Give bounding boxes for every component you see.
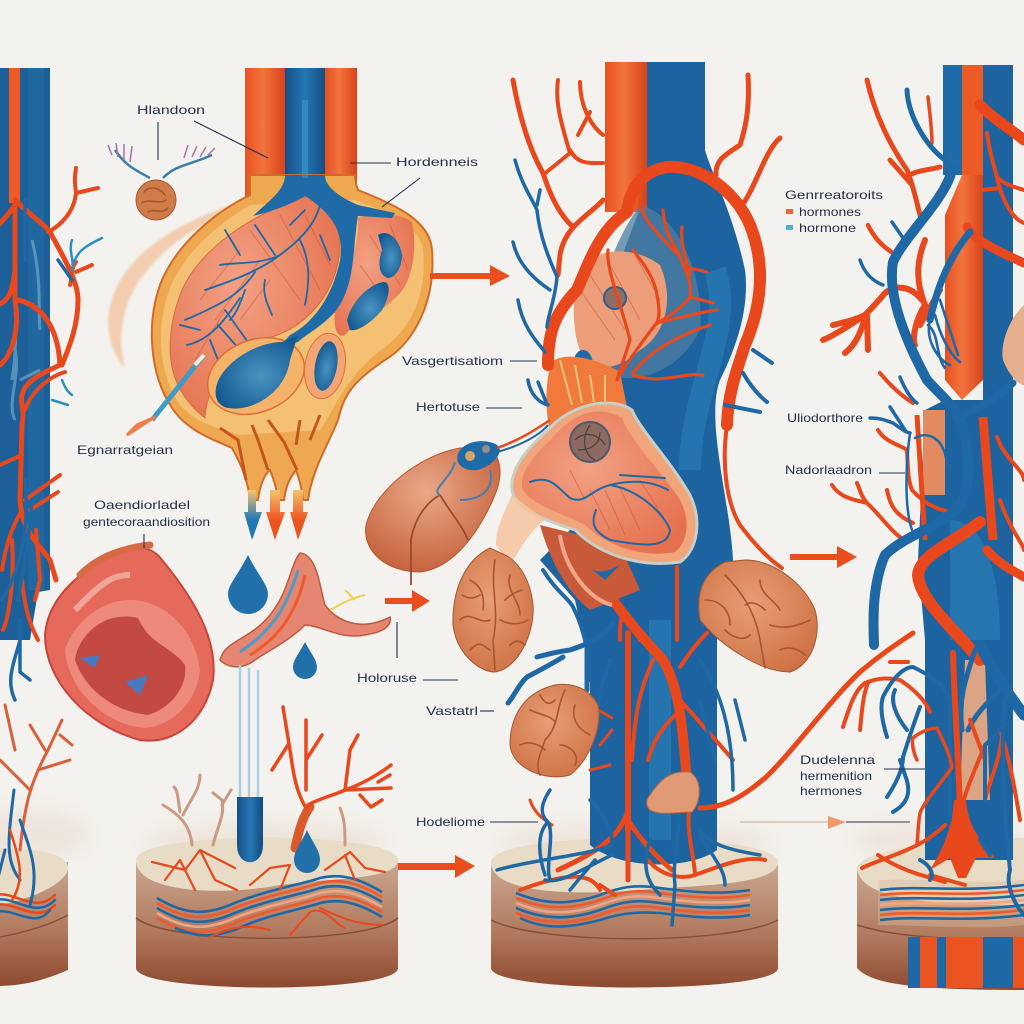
organ: curved duct xyxy=(220,553,430,667)
blue oval chamber xyxy=(196,324,316,428)
arrow: right panel to far right xyxy=(790,546,857,568)
center base cylinder xyxy=(136,822,398,988)
blue side branches xyxy=(497,160,772,925)
streamer to lobe xyxy=(496,495,545,565)
blue knot clamp xyxy=(457,441,500,470)
organ: kidney shaped sac xyxy=(366,420,550,585)
label: gen section: Oaendiorladel xyxy=(94,498,190,512)
top orange trunk xyxy=(605,62,647,212)
tissue striations xyxy=(195,215,408,360)
left column trunk xyxy=(0,68,50,640)
far right blue vessels upper xyxy=(860,90,1013,645)
legend: hormones: hormone xyxy=(799,221,856,235)
blue central vein xyxy=(253,100,395,346)
label: Hlandoon xyxy=(137,103,268,160)
label: Dudelenna hormones: hermenition xyxy=(800,769,872,783)
blue capsule 3 xyxy=(378,233,402,278)
water drops xyxy=(228,555,320,873)
label: Hertotuse: Hertotuse xyxy=(416,400,480,414)
label: Holoruse: Holoruse xyxy=(357,671,417,685)
label: Dudelenna hormones xyxy=(800,753,925,798)
legend: hormones xyxy=(785,188,883,235)
large arching artery xyxy=(548,167,760,425)
base colored bands xyxy=(157,876,382,935)
label: gen section xyxy=(83,498,210,548)
label: Dudelenna hormones: hermones xyxy=(800,784,862,798)
blue test tube with falling streams xyxy=(237,665,263,862)
label: Hlandoon: Hlandoon xyxy=(137,103,205,117)
left coral branches xyxy=(0,705,72,905)
surface branches xyxy=(152,850,385,890)
label: Dudelenna hormones: Dudelenna xyxy=(800,753,875,767)
label: Vastatrl: Vastatrl xyxy=(426,704,478,718)
label: gen section: gentecoraandiosition xyxy=(83,515,210,529)
icon: small brain with antennae xyxy=(108,143,215,220)
thin arrow to far base xyxy=(740,816,910,829)
legend: hormones: hormones xyxy=(799,205,861,219)
base root lines xyxy=(210,908,382,937)
left blue vessels xyxy=(2,200,102,700)
label: Nadorlaadron: Nadorlaadron xyxy=(785,463,872,477)
label: Vasgertisatiom xyxy=(402,354,537,368)
label: Vasgertisatiom: Vasgertisatiom xyxy=(402,354,503,368)
label: Uliodorthore: Uliodorthore xyxy=(787,411,863,425)
small brown chamber xyxy=(604,287,626,309)
blue capsule 1 xyxy=(300,330,350,402)
gland trunk vessels xyxy=(245,68,357,203)
orange arteries xyxy=(513,75,913,895)
label: Hordenneis xyxy=(350,155,478,207)
highlight on vein xyxy=(660,270,720,840)
far right base cylinder xyxy=(850,822,1024,990)
organ: brain-like lobe right xyxy=(699,560,817,672)
arrow: duct to lobes xyxy=(385,590,430,612)
partial organ at edge xyxy=(1002,305,1024,385)
small gland on vessel xyxy=(647,772,699,813)
label: Hodeliome: Hodeliome xyxy=(416,815,485,829)
arrow: base to right xyxy=(398,855,475,878)
flowing orange bundle xyxy=(546,357,628,432)
panel: far right vascular structure xyxy=(823,65,1024,990)
probe instrument xyxy=(127,355,204,435)
label: Egnarratgeian: Egnarratgeian xyxy=(77,443,173,457)
legend: hormones: Genrreatoroits xyxy=(785,188,883,202)
right base cylinder xyxy=(491,822,778,988)
organ: brain-like lobe upper xyxy=(453,548,533,672)
left pale vein xyxy=(12,240,40,420)
label: Hordenneis: Hordenneis xyxy=(396,155,478,169)
vessel under organ xyxy=(540,525,640,610)
arrow: gland to right panel xyxy=(430,265,510,286)
organ: cross-section sac xyxy=(45,545,214,741)
gland ducts xyxy=(220,415,320,480)
blue branching venules xyxy=(180,205,330,365)
far right blue trunks xyxy=(917,65,1013,860)
organ: right gland cross-section xyxy=(512,403,697,563)
panel: left vascular column xyxy=(0,68,102,986)
right gland round chamber xyxy=(570,422,610,462)
large blue vein body xyxy=(540,62,746,864)
coral trees over center base xyxy=(163,707,391,848)
down arrows xyxy=(244,490,308,540)
incoming curved streak xyxy=(108,205,234,368)
label: Holoruse xyxy=(357,622,458,685)
blue capsule 2 xyxy=(347,282,389,330)
label: Nadorlaadron xyxy=(785,463,905,477)
far right lower vessels xyxy=(843,522,1024,915)
gland outer capsule xyxy=(152,175,432,500)
gland pink tissue right xyxy=(335,215,414,336)
panel: right main vascular structure xyxy=(491,62,913,988)
left base cylinder xyxy=(0,809,90,986)
organ: brain-like lobe lower xyxy=(510,684,599,777)
label: Hodeliome xyxy=(416,815,538,829)
far right orange vessels upper xyxy=(823,80,1024,550)
inner tissue xyxy=(573,205,701,380)
gland yellow layer xyxy=(161,200,424,435)
left orange vessels xyxy=(0,68,98,640)
label: Hertotuse xyxy=(416,400,522,414)
label: Vastatrl xyxy=(426,704,494,718)
panel: central gland diagram xyxy=(108,68,510,540)
gland pink tissue left xyxy=(170,194,340,418)
